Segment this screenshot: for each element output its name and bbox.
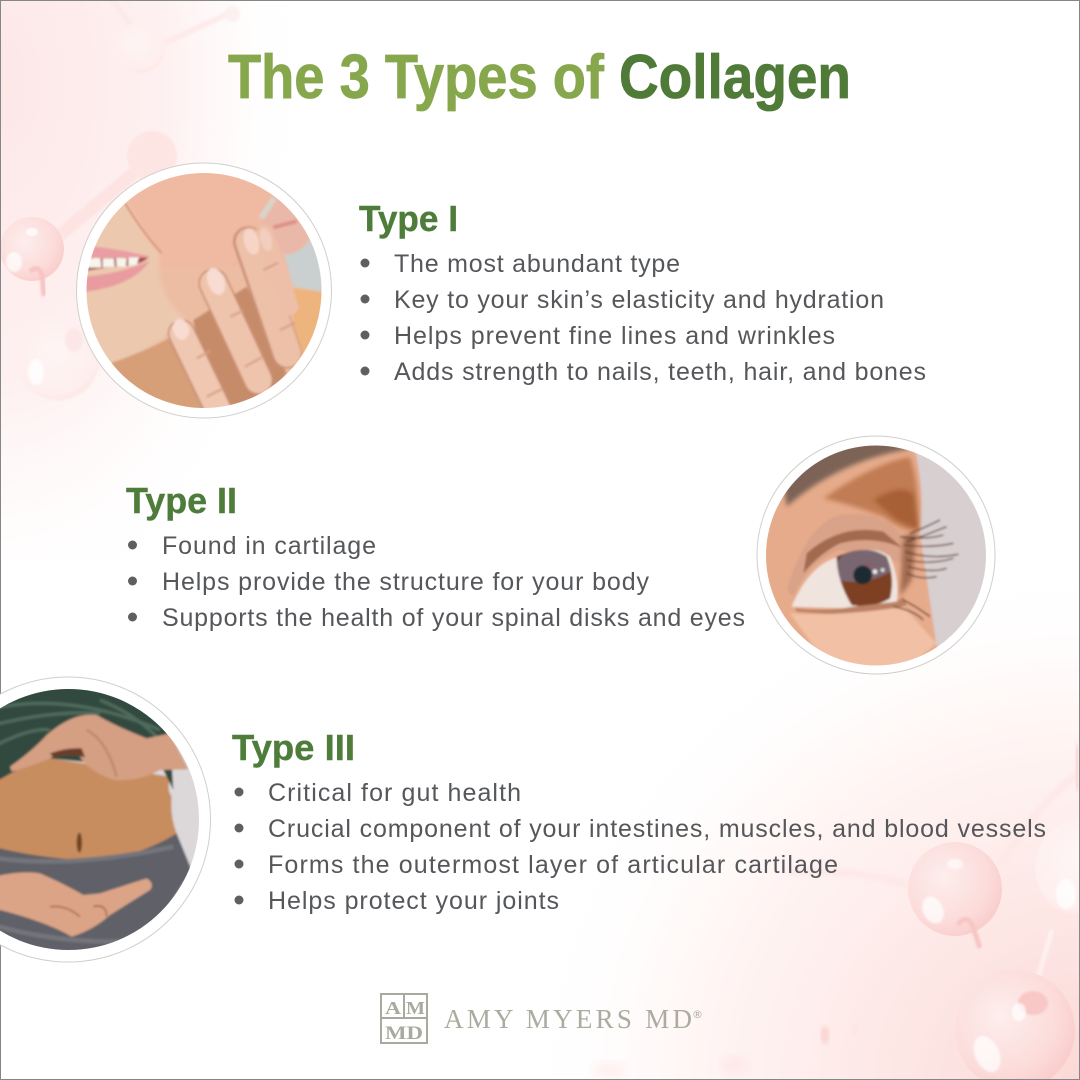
bullet list: type II bbox=[128, 532, 745, 632]
title bbox=[228, 43, 851, 112]
bullet list: type III bbox=[234, 779, 1046, 915]
bullet list: type II: Helps provide the structure for your body bbox=[162, 568, 650, 596]
title: Collagen bbox=[619, 43, 851, 112]
bullet list: type III: Crucial component of your intestines, muscles, and blood vessels bbox=[268, 815, 1046, 843]
logo: Amy Myers MD bbox=[381, 994, 703, 1044]
bullet list: type III: Helps protect your joints bbox=[268, 887, 559, 915]
photo: fingers on cheek bbox=[67, 160, 340, 420]
bullet list: type II: Supports the health of your spinal disks and eyes bbox=[162, 604, 745, 632]
heading: type I: Type I bbox=[359, 198, 458, 239]
logo wordmark: AMY MYERS MD bbox=[444, 1004, 692, 1034]
photo: hands on abdomen bbox=[0, 677, 210, 962]
logo mark: MD bbox=[385, 1023, 423, 1044]
bullet list: type II: Found in cartilage bbox=[162, 532, 376, 560]
panel: type I bbox=[67, 160, 926, 420]
logo mark bbox=[381, 994, 427, 1044]
molecule: left of type I bbox=[0, 131, 177, 400]
molecule: top left bbox=[112, 0, 240, 73]
heading: type II: Type II bbox=[126, 480, 237, 521]
panel: type III bbox=[0, 677, 1046, 962]
heading: type III: Type III bbox=[232, 727, 355, 768]
bullet list: type III: Forms the outermost layer of articular cartilage bbox=[268, 851, 838, 879]
registered mark: ® bbox=[692, 1008, 703, 1021]
pink glow: top left bbox=[0, 0, 310, 560]
bullet list: type III: Critical for gut health bbox=[268, 779, 521, 807]
pink glow: bottom right bbox=[520, 560, 1080, 1080]
logo mark: M bbox=[406, 998, 425, 1018]
bullet list: type I bbox=[360, 250, 926, 386]
photo: eye bbox=[753, 433, 1000, 680]
bullet list: type I: Helps prevent fine lines and wrinkles bbox=[394, 322, 835, 350]
title: The 3 Types of bbox=[228, 43, 604, 112]
logo mark: A bbox=[385, 998, 401, 1018]
panel: type II bbox=[126, 433, 1000, 680]
bullet list: type I: Adds strength to nails, teeth, hair, and bones bbox=[394, 358, 926, 386]
bullet list: type I: The most abundant type bbox=[394, 250, 680, 278]
molecule: bottom right bbox=[592, 745, 1080, 1080]
bullet list: type I: Key to your skin’s elasticity and hydration bbox=[394, 286, 884, 314]
